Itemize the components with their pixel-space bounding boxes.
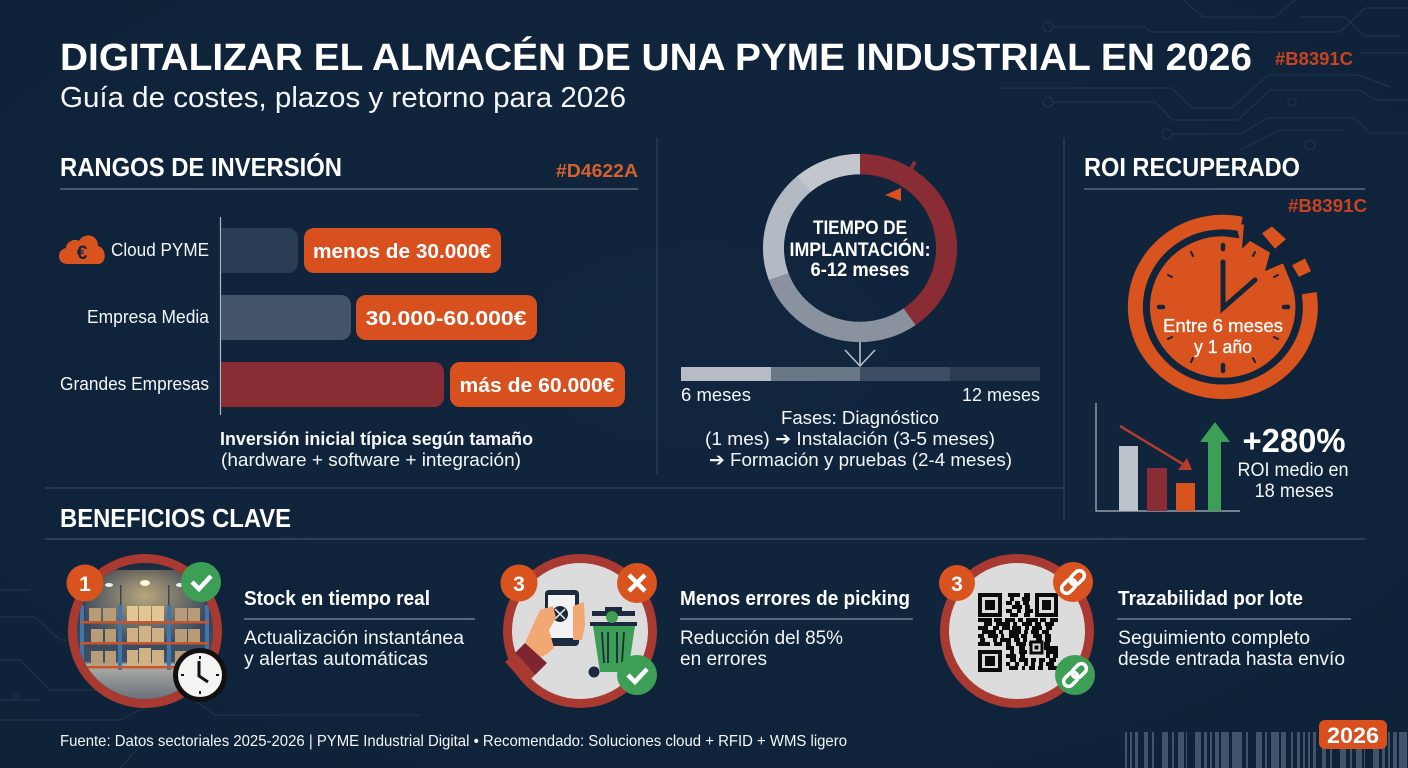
benefit 2 text: Menos errores de picking	[680, 588, 910, 610]
benefit 3 text: desde entrada hasta envío	[1118, 649, 1345, 670]
row: Empresa Media: 30.000-60.000€	[366, 307, 527, 330]
icon: stopwatch: Entre 6 meses	[1163, 315, 1283, 336]
benefit 1 text	[244, 588, 475, 670]
investment note: (hardware + software + integración)	[221, 449, 521, 470]
chart: ROI bars and arrows	[1096, 403, 1240, 511]
panel: ROI	[1084, 152, 1367, 511]
barcode decoration	[1125, 732, 1408, 768]
benefit 3: lot traceability	[939, 558, 1351, 704]
timeline bar	[681, 367, 1040, 381]
year badge	[1319, 720, 1387, 749]
colour code: investment: #D4622A	[556, 160, 638, 181]
badge: number 1: 1	[79, 573, 91, 596]
badge: number 3	[939, 565, 975, 601]
benefit 3 text: Seguimiento completo	[1118, 628, 1310, 649]
phases text	[705, 407, 1012, 470]
benefit 1 text: Actualización instantánea	[244, 628, 464, 649]
footer source: Fuente: Datos sectoriales 2025-2026 | PYME Industrial Digital • Recomendado: Soluciones cloud + RFID + WMS ligero	[60, 733, 847, 750]
benefit 2 text: en errores	[680, 649, 767, 670]
icon: orange pointer	[885, 188, 901, 201]
stat: +280% ROI: ROI medio en	[1238, 460, 1348, 481]
phases text: Fases: Diagnóstico	[781, 407, 939, 428]
benefit 3 text	[1117, 588, 1351, 670]
icon: QR code	[944, 558, 1090, 704]
stat: +280% ROI	[1238, 422, 1348, 502]
row: Grandes Empresas	[60, 362, 625, 407]
timeline labels: 12 meses	[962, 384, 1040, 405]
icon: phone and bin	[505, 558, 652, 704]
donut label: 6-12 meses	[810, 260, 910, 281]
benefit 2: fewer picking errors	[500, 558, 913, 704]
heading: key benefits: BENEFICIOS CLAVE	[60, 503, 291, 533]
benefit 3 text: Trazabilidad por lote	[1118, 588, 1303, 610]
badge: number 3	[500, 564, 538, 602]
donut chart	[773, 162, 947, 332]
icon: clock	[173, 648, 227, 702]
colour code: title: #B8391C	[1275, 48, 1353, 69]
title: DIGITALIZAR EL ALMACÉN DE UNA PYME INDUSTRIAL EN 2026	[60, 35, 1252, 79]
heading: ROI: ROI RECUPERADO	[1084, 152, 1300, 182]
colour code: ROI: #B8391C	[1288, 195, 1367, 216]
badge: check	[617, 655, 657, 695]
badge: number 3: 3	[951, 573, 963, 596]
benefit 2 text	[680, 588, 913, 670]
icon: stopwatch: y 1 año	[1194, 336, 1252, 357]
stat: +280% ROI: +280%	[1242, 422, 1346, 459]
badge: number 1	[66, 564, 104, 602]
benefit 2 text: Reducción del 85%	[680, 628, 843, 649]
year badge: 2026	[1327, 723, 1379, 748]
stat: +280% ROI: 18 meses	[1254, 481, 1334, 502]
panel: key benefits	[45, 503, 1365, 705]
row: Grandes Empresas: Grandes Empresas	[60, 374, 209, 394]
donut label	[790, 218, 930, 281]
subtitle: Guía de costes, plazos y retorno para 2026	[60, 82, 626, 114]
row: Cloud PYME: Cloud PYME	[111, 240, 209, 260]
timeline labels: 6 meses	[681, 384, 751, 405]
badge: cross	[617, 563, 657, 603]
icon: euro cloud: €	[77, 243, 88, 264]
timeline labels	[681, 384, 1040, 405]
benefit 1: real-time stock	[66, 558, 475, 705]
benefit 1 text: Stock en tiempo real	[244, 588, 430, 610]
badge: number 3: 3	[513, 573, 525, 596]
donut label: IMPLANTACIÓN:	[790, 239, 930, 261]
investment note: Inversión inicial típica según tamaño	[220, 428, 533, 449]
icon: euro cloud	[59, 235, 105, 264]
icon: stopwatch	[1135, 222, 1311, 392]
badge: chain link orange	[1053, 562, 1093, 602]
badge: chain link green	[1055, 655, 1095, 695]
benefit 1 text: y alertas automáticas	[244, 649, 428, 670]
row: Grandes Empresas: más de 60.000€	[460, 374, 615, 397]
heading: investment ranges: RANGOS DE INVERSIÓN	[60, 152, 342, 182]
row: Cloud PYME: menos de 30.000€	[313, 240, 492, 263]
investment note	[220, 428, 533, 470]
panel: implementation time	[681, 162, 1040, 470]
donut label: TIEMPO DE	[813, 218, 907, 239]
arrow: down to timeline	[845, 342, 875, 366]
row: Empresa Media: Empresa Media	[87, 307, 210, 327]
row: Cloud PYME	[111, 228, 501, 273]
phases text: (1 mes) ➔ Instalación (3-5 meses)	[705, 428, 995, 449]
row: Empresa Media	[87, 295, 537, 340]
icon: warehouse	[70, 558, 220, 705]
badge: check	[181, 562, 221, 602]
panel: investment ranges	[59, 152, 638, 470]
phases text: ➔ Formación y pruebas (2-4 meses)	[709, 449, 1012, 470]
